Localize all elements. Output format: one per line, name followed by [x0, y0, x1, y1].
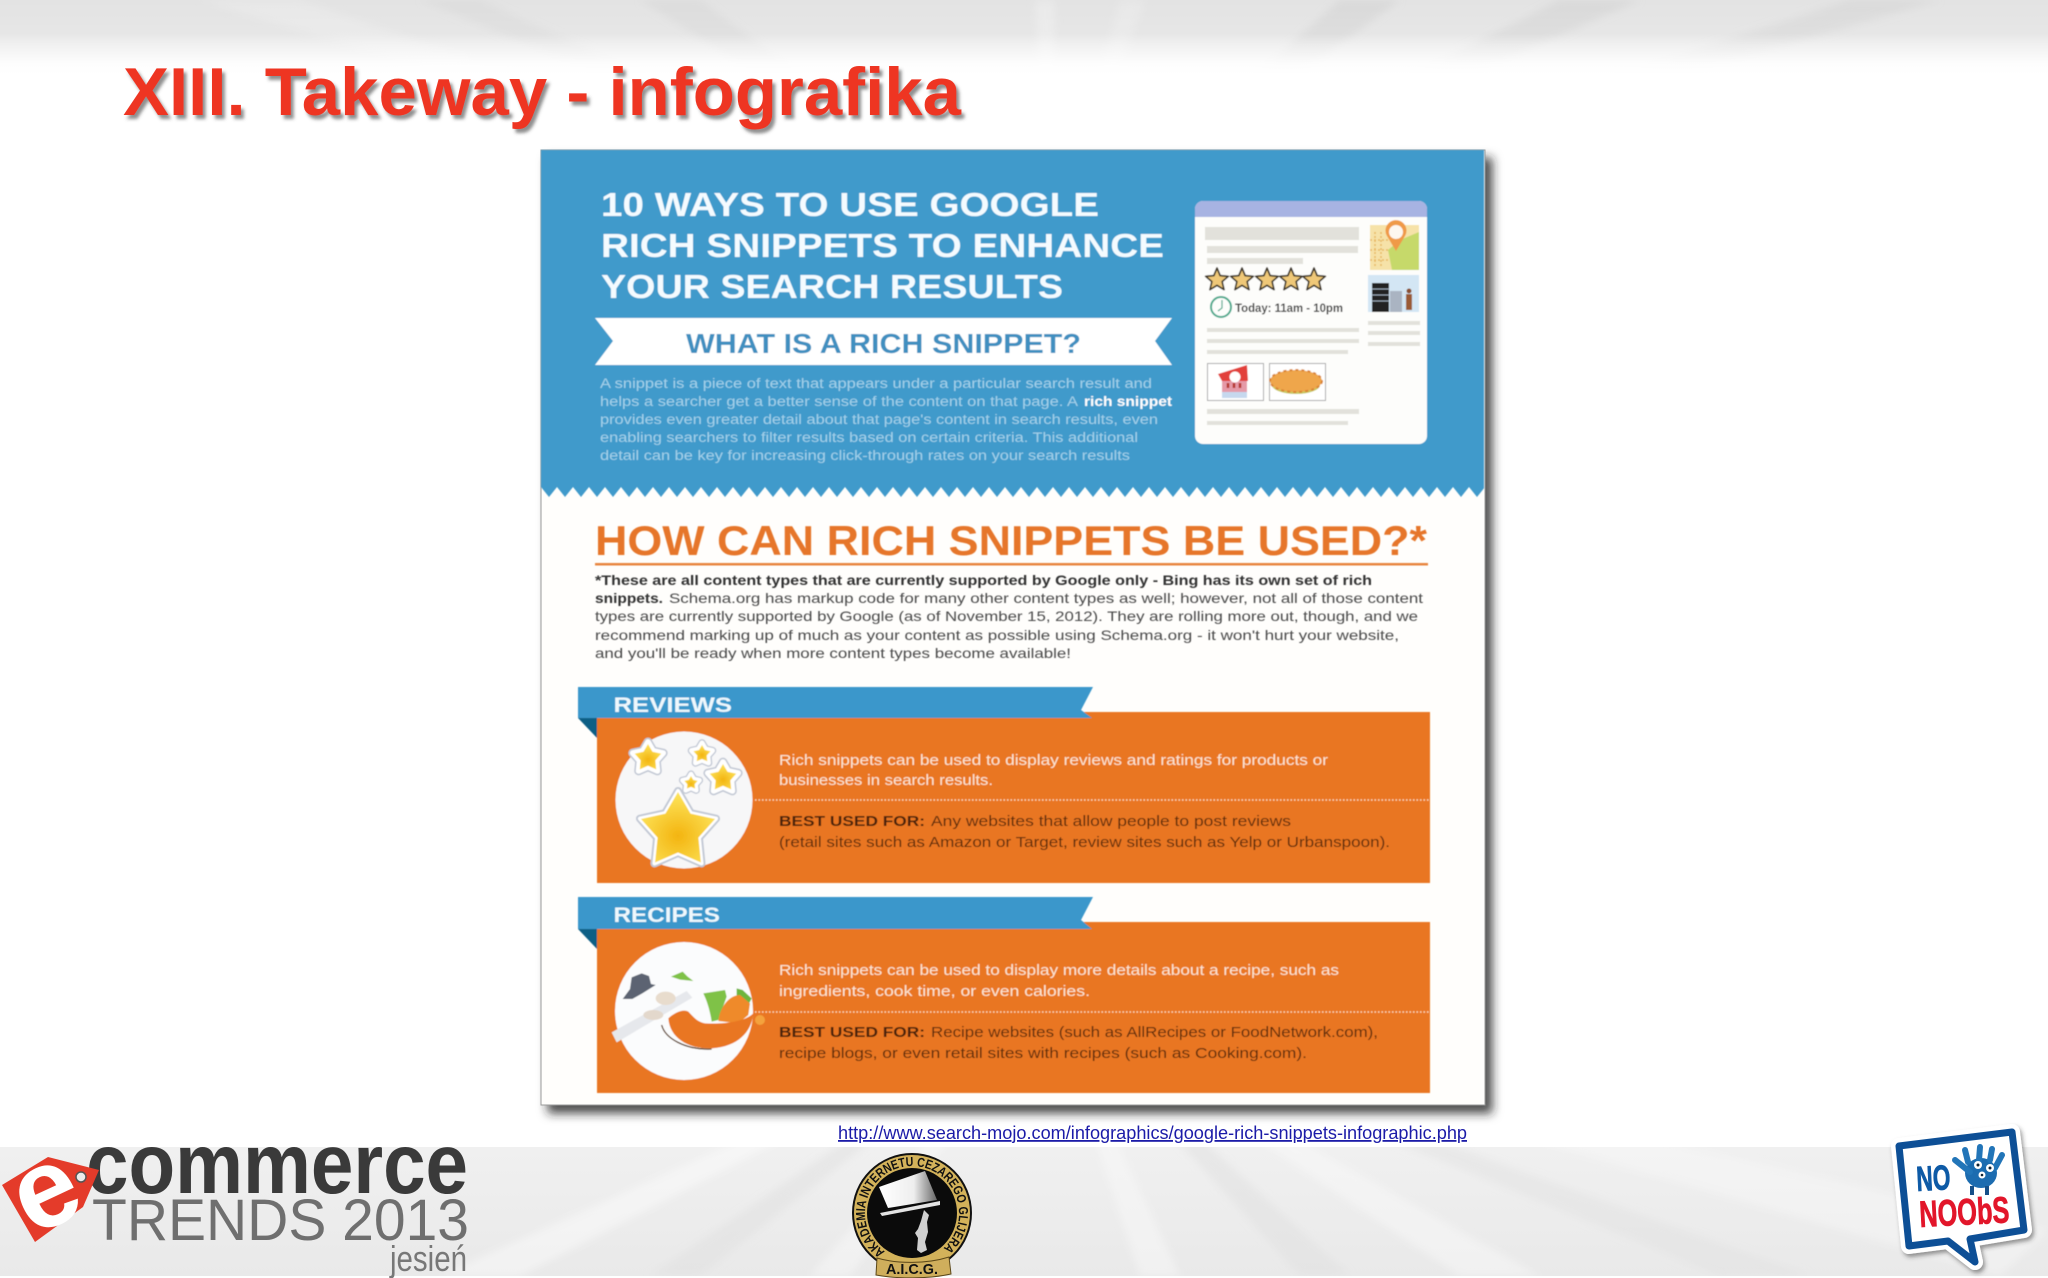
icon: pie thumbnail	[1270, 364, 1326, 400]
text block: snippet definition: provides even greater detail about that page's content in search results, even	[600, 412, 1158, 427]
heading: 10 ways	[601, 187, 1164, 306]
reviews best used for: (retail sites such as Amazon or Target, review sites such as Yelp or Urbanspoon).	[779, 835, 1390, 851]
text block: snippet definition: detail can be key for increasing click-through rates on your search results	[600, 448, 1130, 463]
text block: snippet definition	[600, 376, 1173, 463]
title: XIII. Takeway - infografika	[123, 54, 962, 130]
background band: top	[0, 0, 2048, 58]
heading: 10 ways: RICH SNIPPETS TO ENHANCE	[601, 228, 1164, 265]
divider: orange rule	[595, 563, 1428, 566]
panel: reviews	[578, 687, 1430, 883]
reviews best used for: BEST USED FOR:	[779, 814, 925, 830]
reviews heading: REVIEWS	[614, 694, 732, 717]
icon: clock	[1211, 297, 1231, 317]
text block: note on content types	[595, 572, 1423, 661]
icon: stars	[616, 732, 752, 868]
text block: note on content types: snippets.	[595, 590, 663, 606]
text block: note on content types: and you'll be ready when more content types become available!	[595, 645, 1071, 661]
heading: 10 ways: YOUR SEARCH RESULTS	[601, 269, 1063, 306]
recipes description: ingredients, cook time, or even calories.	[779, 984, 1090, 1000]
source link: http://www.search-mojo.com/infographics/google-rich-snippets-infographic.php	[838, 1123, 1467, 1143]
logo: ecommerce trends 2013: TRENDS 2013	[92, 1188, 469, 1253]
text block: snippet definition: enabling searchers to filter results based on certain criteria. This additional	[600, 430, 1138, 445]
panel: blue header	[541, 150, 1484, 497]
reviews best used for	[779, 814, 1390, 851]
icon: five stars	[1206, 268, 1325, 290]
text block: note on content types: *These are all content types that are currently supported by Google only - Bing has its own set of rich	[595, 572, 1372, 588]
logo: no noobs speech bubble	[1899, 1132, 2024, 1262]
icon: directory listing	[1368, 275, 1419, 312]
logo: ecommerce trends 2013: commerce	[86, 1117, 468, 1212]
logo: AICG badge: AKADEMIA INTERNETU CEZAREGO GLIJERA	[856, 1157, 968, 1257]
logo: no noobs speech bubble: NO	[1915, 1158, 1951, 1199]
ribbon: what is a rich snippet	[595, 318, 1172, 365]
logo: no noobs speech bubble: NOObS	[1918, 1189, 2010, 1235]
text block: note on content types: recommend marking up of much as your content as possible using Schema.org - it won't hurt your website,	[595, 627, 1399, 643]
panel: search result card	[1195, 201, 1427, 444]
ribbon: what is a rich snippet: WHAT IS A RICH SNIPPET?	[686, 328, 1081, 359]
text block: note on content types: Schema.org has markup code for many other content types as well; however, not all of those content	[669, 590, 1423, 606]
text block: snippet definition: helps a searcher get a better sense of the content on that page. A	[600, 394, 1078, 409]
logo: ecommerce trends 2013: jesień	[389, 1238, 467, 1278]
logo: AICG badge: A.I.C.G.	[886, 1261, 938, 1278]
icon: restaurant thumbnail	[1208, 364, 1264, 400]
panel: recipes	[578, 897, 1430, 1093]
reviews best used for: Any websites that allow people to post reviews	[931, 814, 1291, 830]
recipes best used for: BEST USED FOR:	[779, 1025, 925, 1041]
opening hours label: Today: 11am - 10pm	[1235, 301, 1343, 315]
icon: serving dish	[612, 942, 765, 1080]
icon: map pin	[1370, 220, 1419, 270]
recipes best used for: recipe blogs, or even retail sites with recipes (such as Cooking.com).	[779, 1046, 1307, 1062]
reviews description	[779, 753, 1328, 789]
text block: snippet definition: rich snippet	[1084, 394, 1173, 409]
recipes description: Rich snippets can be used to display more details about a recipe, such as	[779, 963, 1339, 979]
infographic	[541, 150, 1484, 1093]
heading: 10 ways: 10 WAYS TO USE GOOGLE	[601, 187, 1099, 224]
recipes description	[779, 963, 1339, 1000]
recipes heading: RECIPES	[614, 904, 720, 927]
reviews description: Rich snippets can be used to display reviews and ratings for products or	[779, 753, 1328, 769]
heading: how can rich snippets be used: HOW CAN RICH SNIPPETS BE USED?*	[595, 517, 1428, 564]
text block: note on content types: types are currently supported by Google (as of November 15, 2012). They are rolling more out, though, and we	[595, 608, 1418, 624]
recipes best used for	[779, 1025, 1378, 1062]
infographic frame	[541, 150, 1485, 1105]
icon: blue monster	[1955, 1147, 2002, 1195]
logo: ecommerce trends 2013	[0, 1117, 469, 1278]
background band: bottom	[0, 1147, 2048, 1276]
recipes best used for: Recipe websites (such as AllRecipes or FoodNetwork.com),	[931, 1025, 1378, 1041]
text block: snippet definition: A snippet is a piece of text that appears under a particular search result and	[600, 376, 1152, 391]
reviews description: businesses in search results.	[779, 773, 993, 789]
